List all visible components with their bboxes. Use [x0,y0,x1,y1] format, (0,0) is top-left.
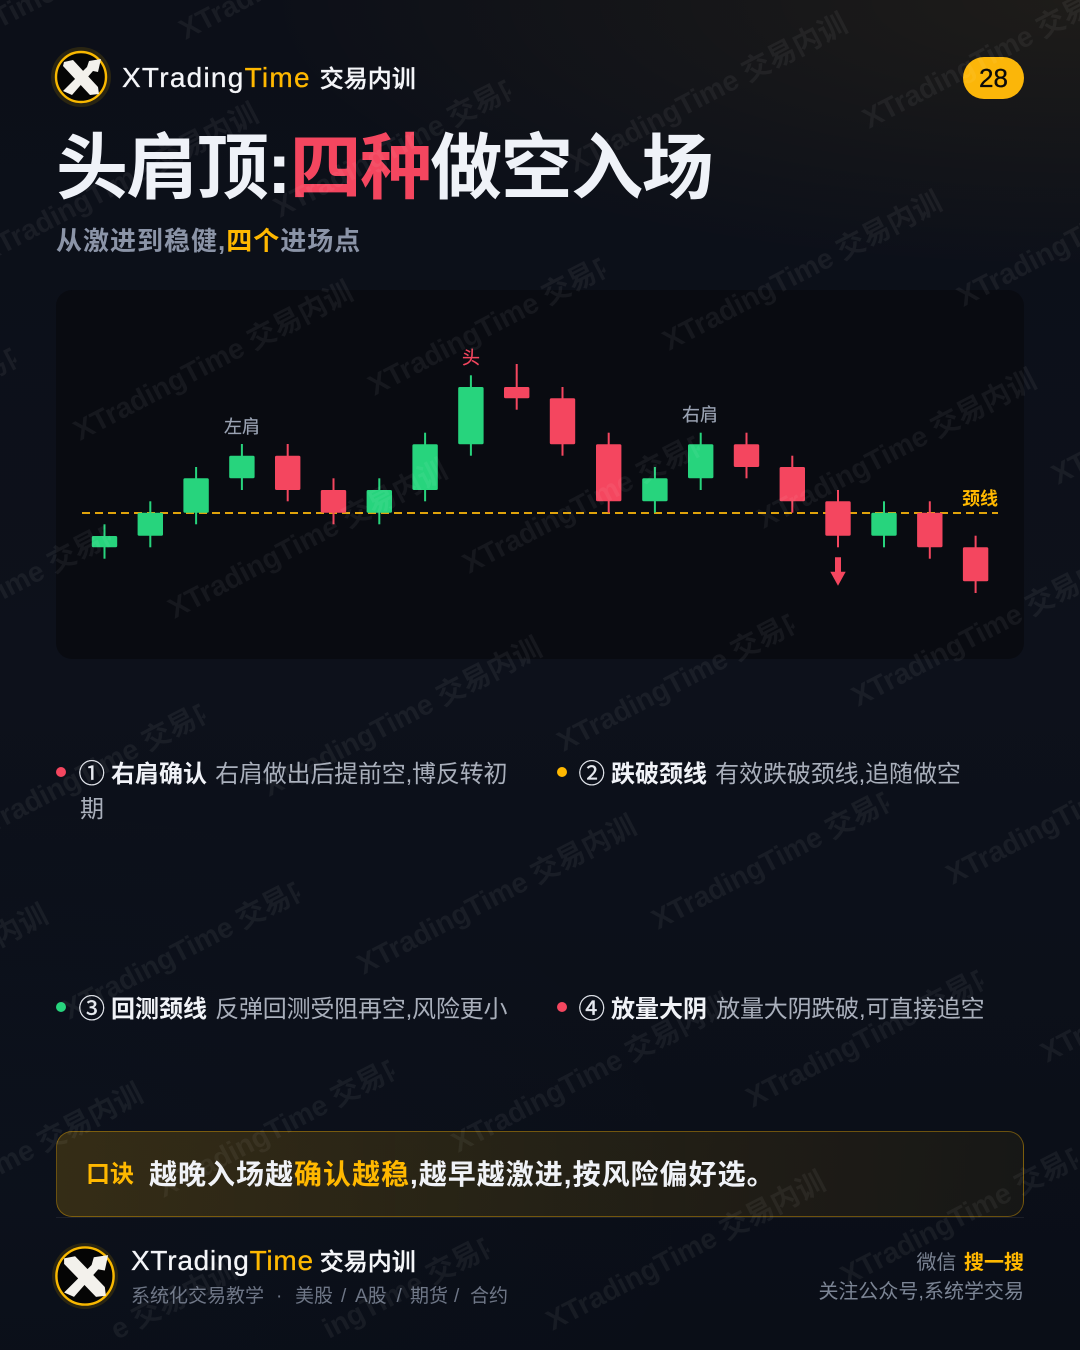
text 1: 右肩确认 右肩做出后提前空,博反转初 [111,761,507,788]
footer tagline: / [396,1286,402,1307]
bullet 4 [557,994,984,1024]
footer tagline: 合约 [470,1286,508,1307]
subtitle: 从激进到稳健,四个进场点 [56,226,361,256]
dot 4 [557,1002,567,1012]
text 2: 跌破颈线 有效跌破颈线,追随做空 [611,761,961,788]
watermark layer: XTradingTime 交易内训 [563,8,853,179]
label: head: 头 [462,348,480,368]
bullet 3 [56,994,507,1024]
watermark layer: XTradingTime 交易内训 [363,231,653,402]
bullet 2 [557,758,961,788]
text 1: 期 [80,796,104,823]
text 1 [78,758,507,823]
watermark layer: XTradingTime 交易内训 [257,632,547,803]
candles [92,364,988,593]
footer wechat line: 微信 搜一搜 [916,1252,1024,1274]
footer tagline: · [276,1286,282,1307]
callout: mnemonic [56,1131,1024,1217]
bullet 1 [56,758,507,823]
callout text: 越晚入场越确认越稳,越早越激进,按风险偏好选。 [149,1159,776,1190]
watermark layer: XTradingTime 交易内训 [446,988,736,1159]
watermark layer: XTradingTime 交易内训 [268,53,558,224]
text 4: ④ [578,994,605,1024]
watermark layer: XTradingTime 交易内训 [152,1033,442,1204]
watermark layer: ingTime 交易内训 [317,1210,537,1345]
footer tagline: 系统化交易教学 [131,1286,264,1307]
footer tagline: 期货 [410,1286,448,1307]
label: right shoulder: 右肩 [682,405,718,425]
watermark layer: XTradingTime 交易内训 [552,587,842,758]
text 1: ① [78,758,105,788]
logo: footer [52,1243,118,1309]
footer divider [56,1217,1024,1218]
page number badge: 28 [979,63,1008,93]
candlestick chart [82,348,998,593]
logo: top [51,47,111,107]
arrow: breakdown [830,557,846,586]
title: 头肩顶:四种做空入场 [56,129,712,209]
watermark layer: XTradingTime 交易内训 [163,454,453,625]
text 3: 回测颈线 反弹回测受阻再空,风险更小 [111,996,507,1023]
footer tagline: / [454,1286,459,1307]
text 2: ② [578,758,605,788]
watermark layer: XTradingTime 交易内训 [352,810,642,981]
label: neckline: 颈线 [962,489,998,509]
watermark layer: XTradingTime 交易内训 [741,943,1031,1114]
text 3: ③ [78,994,105,1024]
text 4: 放量大阴 放量大阴跌破,可直接追空 [611,996,984,1023]
footer tagline: A股 [355,1286,387,1307]
panel: candlestick chart [56,290,1024,659]
callout label: 口诀 [86,1161,134,1188]
watermark layer: XTradingTime 交易内训 [541,1166,831,1337]
watermark layer: XTradingTime 交易内训 [646,765,936,936]
brand name: footer: XTradingTime交易内训 [131,1245,416,1276]
neckline [82,512,998,514]
watermark layer: XTradingTime 交易内训 [457,409,747,580]
footer tagline: / [341,1286,346,1307]
watermark layer: e 交易内训 [105,1254,242,1346]
footer follow line: 关注公众号,系统学交易 [818,1281,1024,1303]
label: left shoulder: 左肩 [224,417,260,437]
dot 3 [56,1002,66,1012]
watermark layer: XTradingTime 交易内训 [657,186,947,357]
page number badge [963,57,1024,99]
watermark layer: XTradingTime 交易内训 [752,364,1042,535]
watermark layer: XTradingTime 交易内训 [68,276,358,447]
footer tagline: 美股 [295,1286,333,1307]
dot 2 [557,767,567,777]
dot 1 [56,767,66,777]
footer tagline [131,1286,508,1307]
watermark layer: XTradingTime 交易内训 [57,855,347,1026]
brand name: top: XTradingTime 交易内训 [122,62,416,93]
